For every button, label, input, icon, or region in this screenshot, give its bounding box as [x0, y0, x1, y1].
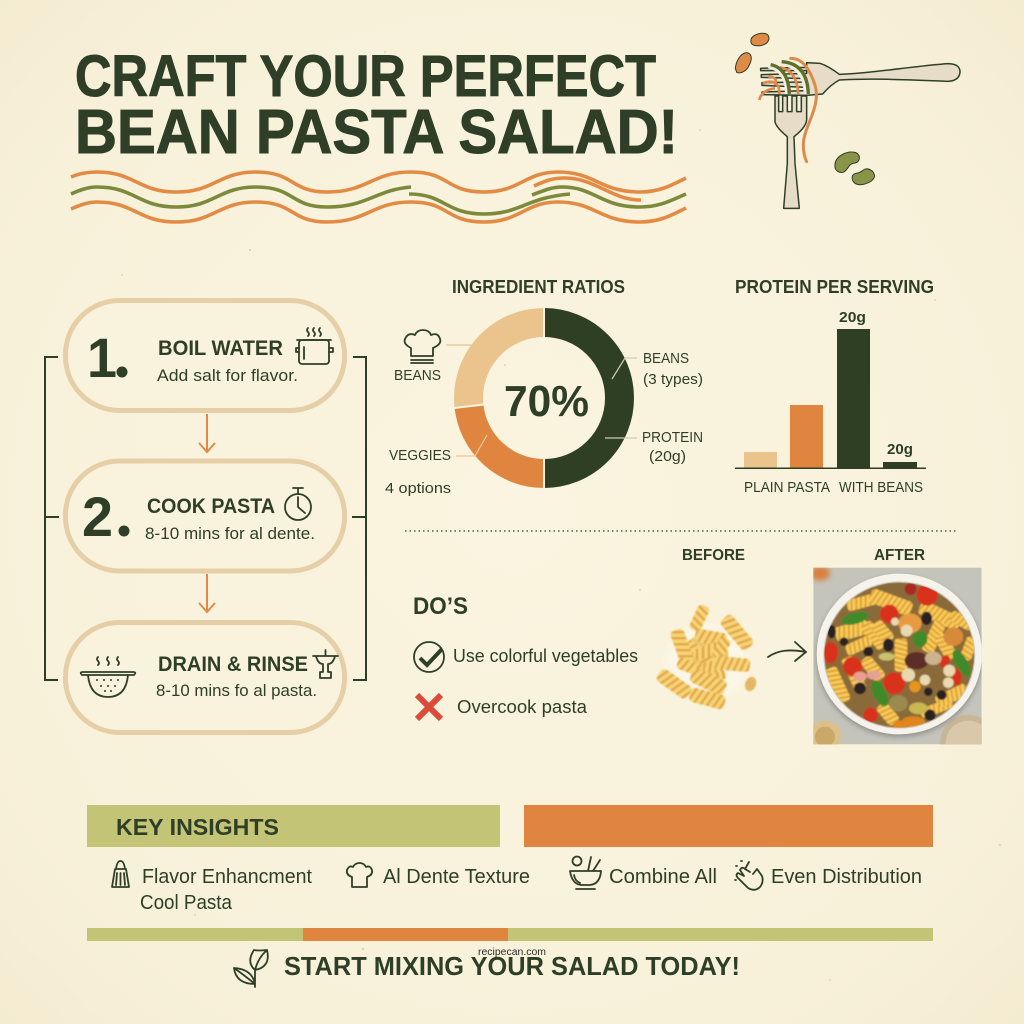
insight: even distribution: Even Distribution — [771, 866, 922, 888]
step 2: COOK PASTA — [147, 495, 275, 518]
title: CRAFT YOUR PERFECT — [75, 44, 656, 109]
label: beans with chef hat: BEANS — [394, 367, 441, 384]
step 1: BOIL WATER — [158, 337, 283, 360]
label: beans 3 types: BEANS — [643, 350, 689, 367]
label: beans 3 types — [612, 350, 703, 388]
label: beans with chef hat — [394, 330, 493, 384]
illustration: dry fusilli — [655, 603, 758, 710]
label: veggies 4 options — [385, 435, 487, 497]
step 3: DRAIN & RINSE — [158, 653, 308, 676]
icon: sprinkling hand — [735, 861, 763, 890]
step 3 — [66, 622, 344, 732]
step 1: Add salt for flavor. — [157, 366, 298, 385]
axis labels: WITH BEANS — [839, 480, 923, 496]
axis labels — [744, 480, 923, 496]
insight: combine: Combine All — [609, 866, 717, 888]
orange bar — [524, 805, 933, 847]
donut centre value: 70% — [504, 377, 589, 426]
call to action: START MIXING YOUR SALAD TODAY! — [284, 951, 740, 981]
arrow: before to after — [768, 642, 806, 661]
bracket: right connector — [352, 357, 366, 680]
icon: leaf sprig — [234, 950, 268, 987]
insight: flavor: Cool Pasta — [140, 892, 233, 914]
icon: pot — [296, 328, 333, 364]
label: beans 3 types: (3 types) — [643, 371, 703, 388]
panel: do's and don'ts — [413, 593, 638, 719]
step 1: 1 — [87, 326, 117, 389]
bars — [735, 329, 926, 469]
icon: fork with pasta and beans — [735, 33, 960, 208]
photo: finished salad bowl — [813, 568, 982, 744]
label: protein 20g — [605, 429, 703, 465]
step 2: 2 — [82, 485, 113, 548]
label: protein 20g: PROTEIN — [642, 429, 703, 446]
value labels: 20g — [887, 441, 913, 458]
label: veggies 4 options: VEGGIES — [389, 447, 451, 464]
title — [75, 44, 678, 167]
icon: cross — [417, 695, 441, 719]
arrow: step 1 to 2 — [199, 414, 215, 452]
heading bar: key insights — [87, 805, 500, 847]
wavy pasta divider — [71, 172, 686, 222]
donut chart — [454, 306, 619, 490]
panel: protein per serving bar chart — [735, 277, 934, 496]
icon: timer — [285, 488, 311, 520]
axis labels: PLAIN PASTA — [744, 480, 830, 496]
icon: sink basin — [313, 650, 338, 678]
icon: salt shaker — [112, 861, 129, 887]
text: do: Use colorful vegetables — [453, 646, 638, 666]
heading: protein per serving: PROTEIN PER SERVING — [735, 277, 934, 297]
panel: process steps — [45, 300, 366, 732]
bracket: left connector — [45, 357, 59, 680]
panel: ingredient ratios donut — [385, 277, 703, 497]
insight: al dente: Al Dente Texture — [383, 866, 530, 888]
value labels: 20g — [839, 309, 866, 326]
arrow: step 2 to 3 — [199, 574, 215, 612]
step 2: 8-10 mins for al dente. — [145, 524, 315, 543]
heading bar: key insights: KEY INSIGHTS — [116, 814, 279, 840]
icon: mixing bowl — [570, 856, 601, 889]
title: BEAN PASTA SALAD! — [75, 98, 678, 167]
value labels — [839, 309, 913, 458]
segmented bar — [87, 928, 933, 941]
icon: chef hat — [347, 863, 372, 887]
icon: check — [414, 642, 444, 672]
step 3: 8-10 mins fo al pasta. — [156, 681, 317, 700]
heading: do's: DO’S — [413, 593, 468, 620]
text: don't: Overcook pasta — [457, 697, 588, 717]
heading: before: BEFORE — [682, 547, 745, 564]
insight: flavor — [112, 861, 312, 914]
insight: combine — [570, 856, 717, 889]
insight: flavor: Flavor Enhancment — [142, 866, 312, 888]
label: veggies 4 options: 4 options — [385, 480, 451, 497]
step 2 — [66, 461, 344, 571]
heading: ingredient ratios: INGREDIENT RATIOS — [452, 277, 625, 297]
panel: before and after — [656, 549, 982, 744]
label: protein 20g: (20g) — [649, 448, 686, 465]
panel: key insights — [87, 805, 933, 914]
icon: colander — [81, 657, 135, 697]
insight: even distribution — [735, 861, 922, 890]
watermark: recipecan.com — [478, 947, 546, 958]
step 1 — [66, 300, 344, 410]
heading: after: AFTER — [874, 547, 925, 564]
